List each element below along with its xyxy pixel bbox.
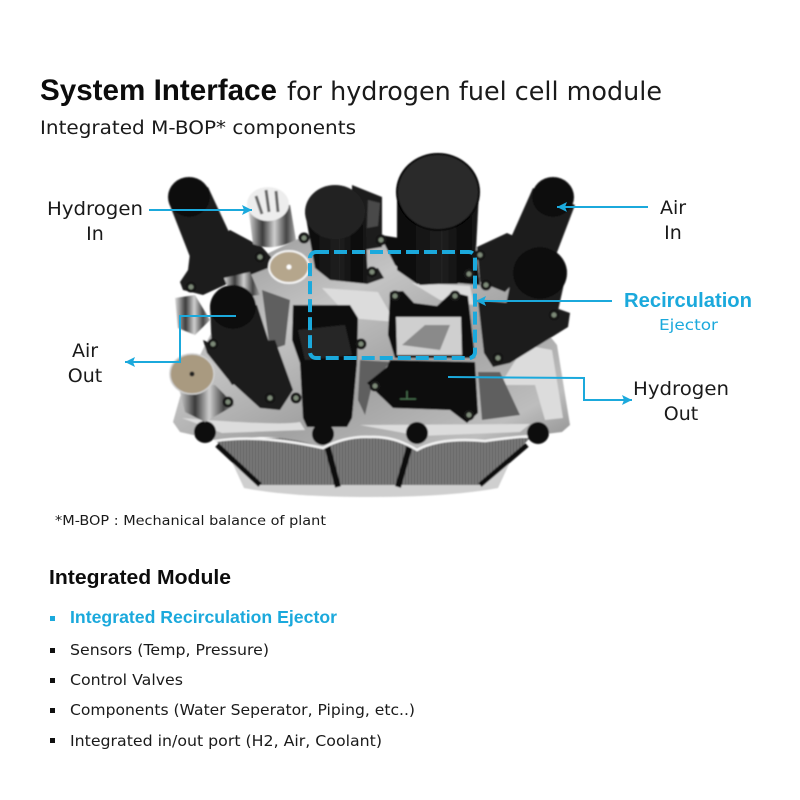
lower silver base <box>232 462 510 497</box>
actuator block <box>292 305 358 427</box>
plate rim highlight <box>215 436 530 450</box>
plate highlights <box>182 283 563 436</box>
label: air in: Air <box>660 197 686 219</box>
arrow: recirculation ejector <box>476 300 612 302</box>
disc: lower valve <box>170 354 214 394</box>
lower black plate <box>367 360 478 423</box>
dashed highlight: recirculation ejector <box>310 252 475 358</box>
module illustration <box>168 154 575 497</box>
pipe: front right <box>478 247 570 367</box>
label: hydrogen out: Hydrogen <box>633 378 729 400</box>
label: hydrogen out <box>633 378 729 425</box>
title: for hydrogen fuel cell module <box>287 77 662 107</box>
subtitle: Integrated M-BOP* components <box>40 118 356 139</box>
pipe: front left <box>203 285 293 410</box>
label: air in: In <box>664 222 682 244</box>
item: sensors: Sensors (Temp, Pressure) <box>70 641 269 659</box>
item: in/out ports: Integrated in/out port (H2, Air, Coolant) <box>70 732 382 750</box>
label: recirculation ejector: Recirculation <box>624 290 752 312</box>
item: components: Components (Water Seperator, Piping, etc..) <box>70 701 415 719</box>
small cylinder <box>305 185 384 284</box>
label: hydrogen out: Out <box>664 403 698 425</box>
plate dark reflections <box>262 290 520 420</box>
label: hydrogen in: Hydrogen <box>47 198 143 220</box>
list: integrated module features <box>50 607 415 750</box>
heat-exchanger core fins <box>213 438 530 487</box>
label: air out <box>68 340 102 387</box>
label: air in <box>660 197 686 244</box>
label: hydrogen in <box>47 198 143 245</box>
footnote: *M-BOP : Mechanical balance of plant <box>55 513 326 529</box>
label: recirculation ejector: Ejector <box>659 316 719 334</box>
item: recirculation ejector: Integrated Recirculation Ejector <box>70 607 337 627</box>
arrow: air out <box>125 316 236 362</box>
pipe: top right <box>477 177 575 292</box>
heading: integrated module: Integrated Module <box>49 567 231 589</box>
arrow: hydrogen in <box>149 209 252 211</box>
title: System Interface <box>40 74 277 107</box>
arrow: hydrogen out <box>448 377 632 400</box>
large cylinder <box>380 154 480 285</box>
disc: upper valve <box>269 251 309 283</box>
chrome bolts: left <box>175 272 260 422</box>
label: recirculation ejector <box>624 290 752 334</box>
flange bolts <box>187 234 558 419</box>
perimeter bolts <box>194 421 549 445</box>
window frame plate <box>388 291 475 358</box>
item: control valves: Control Valves <box>70 671 183 689</box>
label: hydrogen in: In <box>86 223 104 245</box>
silver top plate <box>173 238 570 450</box>
pipe: top left <box>168 177 272 295</box>
title <box>40 74 662 107</box>
chrome sensor: hydrogen in <box>247 187 296 247</box>
label: air out: Out <box>68 365 102 387</box>
label: air out: Air <box>72 340 98 362</box>
arrow: air in <box>557 206 648 208</box>
